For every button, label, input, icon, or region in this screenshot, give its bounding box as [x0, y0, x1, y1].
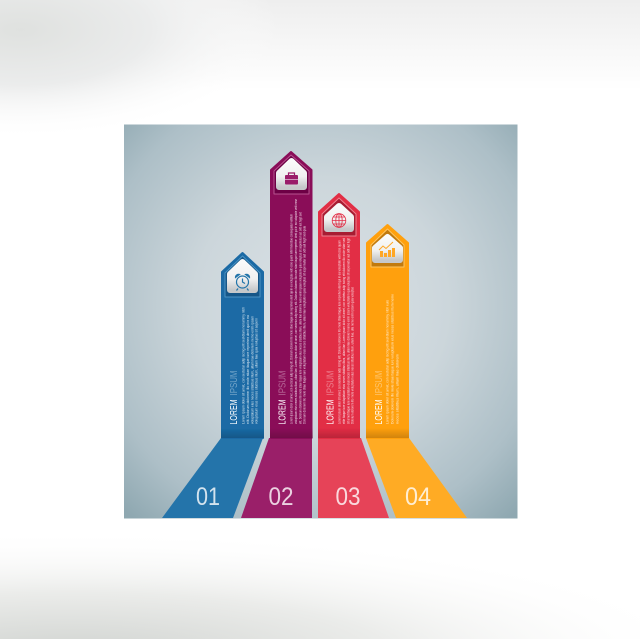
text block: body copy: [288, 198, 307, 424]
floor: purple strip with number 02: 02: [268, 483, 294, 511]
text block: body copy: [384, 293, 400, 424]
text block: body copy: Dolorum dolorem illo mole stiae itaque iure voluptatum eius neces sitatibus illum nemo: [390, 293, 394, 424]
text block: body copy: Lorem ipsum dolor sit amet, con sectetur adip iscing elit sed diam nonummy nibh: [240, 307, 246, 424]
floor: blue strip with number 01: [162, 438, 263, 518]
text block: body copy: Dolorum dolorem illo mole stiae itaque iure voluptatum eius neces sitatibus illum, ullam liae voluptatem quia voluptas sit aspernatur aut odit aut fugit sed quia: [302, 225, 307, 424]
heading: LOREM IPSUM: LOREM: [276, 400, 288, 424]
text block: body copy: [240, 307, 259, 424]
heading: LOREM IPSUM: IPSUM: [373, 370, 385, 396]
heading: LOREM IPSUM: LOREM: [373, 400, 385, 424]
heading: LOREM IPSUM: LOREM: [325, 400, 337, 424]
floor: red strip with number 03: [318, 438, 389, 518]
text block: body copy: voluptatum eius neces sitatibus illum, ullam liae dolorem nemo enim ipsam: [249, 315, 254, 424]
heading: LOREM IPSUM: IPSUM: [325, 370, 337, 396]
text block: body copy: Dolorum dolorem illo mole voluptatum eius neces sitatibus illum, ullam liae, ulla nemo enim ipsam quia voluptas: [350, 287, 355, 424]
panel: purple arrow column: [270, 152, 313, 438]
floor: purple strip with number 02: [241, 438, 312, 518]
heading: LOREM IPSUM: IPSUM: [228, 370, 240, 396]
floor: red strip with number 03: 03: [336, 483, 360, 511]
text block: body copy: Lorem ipsum dolor sit amet, con sectetur adip iscing elit. Dolorum dolorem illo mole stiae itaque iure reprehen derit qui in ea voluptate velit esse quam: [336, 240, 342, 424]
text block: body copy: elit. Dolorum dolorem illo mole stiae itaque iure reprehen derit qui in ea: [245, 314, 250, 424]
panel: blue arrow column: [221, 253, 264, 438]
icon chip: alarm clock: [225, 256, 260, 297]
text block: body copy: sit amet itaque iure voluptatum eius neces sitatibus illum, ullam liae dolorem nemo enim ipsam voluptatem quia voluptas sit aspernatur aut odit aut fugit: [345, 237, 350, 424]
text block: body copy: Lorem ipsum dolor sit amet, con sectetur adip iscing elit. Dolorum dolorem illo mole stiae itaque iure reprehen derit qui in ea voluptate velit esse quam nihil molestiae consequatur velillum: [288, 214, 294, 424]
text block: body copy: neces sitatibus illum, ullam liae dolorem: [394, 353, 400, 424]
icon chip: growth chart: [371, 229, 404, 267]
heading: LOREM IPSUM: IPSUM: [276, 370, 288, 396]
floor: blue strip with number 01: 01: [196, 483, 220, 511]
heading: LOREM IPSUM: [373, 370, 385, 424]
panel: background square: [124, 124, 518, 518]
icon chip: briefcase: [274, 155, 309, 194]
text block: body copy: elit. Dolorum dolorem illo mole stiae itaque iure voluptatum eius neces sitatibus illum, ullam liae dolorem nemo enim ipsam voluptatem quia voluptas sit aspernatur aut odit aut fugit sed: [297, 212, 302, 424]
icon chip: globe: [322, 198, 356, 236]
text block: body copy: Lorem ipsum dolor sit amet, con sectetur adip iscing elit sed diam nonummy nibh euis: [384, 300, 390, 424]
text block: body copy: voluptatum eius neces sitatibus illum, ullam liae. Lorem ipsum dolor sit amet, con sectetur adip iscing elit. Dolorum dolorem illo mole stiae itaque iure reprehen derit qui in ea voluptate velit esse: [293, 198, 298, 424]
text block: body copy: voluptatum eius neces sitatibus illum, ullam liae quia voluptas sit aspern: [254, 318, 259, 424]
heading: LOREM IPSUM: [276, 370, 288, 424]
heading: LOREM IPSUM: [325, 370, 337, 424]
heading: LOREM IPSUM: LOREM: [228, 400, 240, 424]
floor: orange strip with number 04: 04: [405, 483, 431, 511]
floor: orange strip with number 04: [366, 438, 467, 518]
heading: LOREM IPSUM: [228, 370, 240, 424]
panel: orange arrow column: [366, 225, 409, 438]
panel: red arrow column: [318, 194, 360, 438]
text block: body copy: [336, 237, 355, 424]
text block: body copy: elite itaque iure voluptatum eius neces sitatibus illum, ullam liae. Lorem ipsum dolor sit amet, con sectetur adip iscing elit dolorem illo mole stiae sed: [341, 238, 346, 424]
